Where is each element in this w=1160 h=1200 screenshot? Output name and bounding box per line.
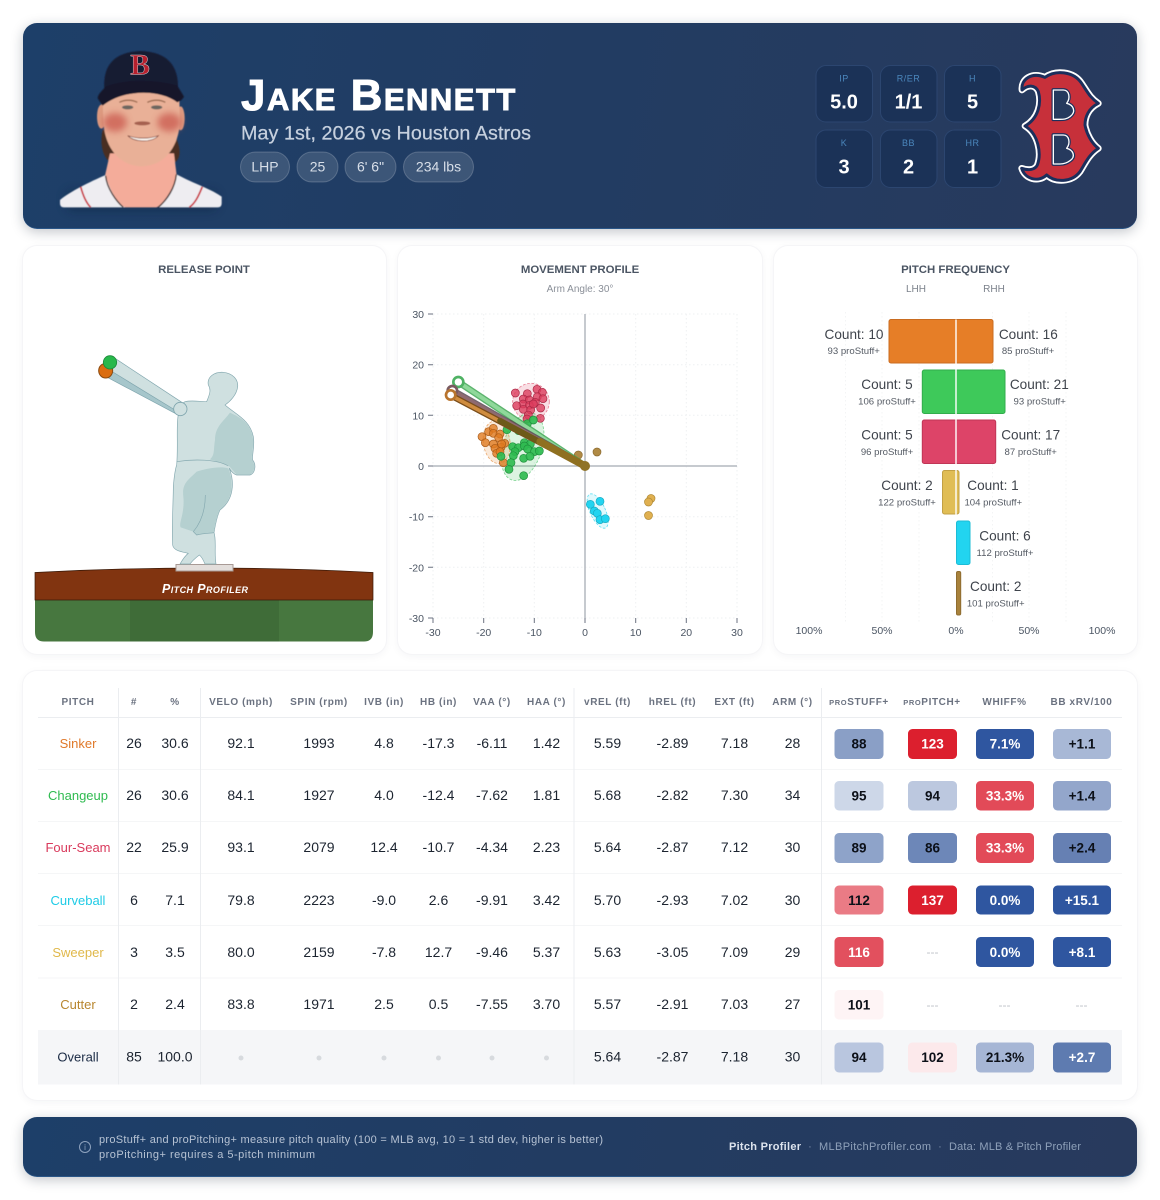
center line <box>955 320 957 514</box>
batter side labels: LHH <box>906 284 926 295</box>
row: Cutter <box>60 990 1088 1020</box>
row: Overall <box>57 1042 1111 1072</box>
footer credits: MLBPitchProfiler.com <box>819 1141 931 1153</box>
row: Curveball: 137 <box>921 893 944 908</box>
row: Changeup: +1.4 <box>1069 788 1096 804</box>
row: Curveball: -9.91 <box>476 892 508 908</box>
row: Four-Seam: -4.34 <box>476 839 508 855</box>
bar: Four-Seam: Count: 17 <box>1001 428 1060 443</box>
row: Cutter: 2 <box>130 996 138 1012</box>
row: Four-Seam: 12.4 <box>370 839 398 855</box>
row: Cutter: 101 <box>848 998 871 1012</box>
bar: Four-Seam: 96 proStuff+ <box>861 447 914 458</box>
row: Overall: 102 <box>921 1050 944 1065</box>
footer credits: · <box>938 1141 942 1153</box>
footnote text: proStuff+ and proPitching+ measure pitch quality (100 = MLB avg, 10 = 1 std dev, higher is better) <box>99 1134 603 1146</box>
row: Changeup: 4.0 <box>374 787 394 803</box>
game subtitle: May 1st, 2026 vs Houston Astros <box>241 122 531 144</box>
row: Cutter: 2.5 <box>374 996 394 1012</box>
scatter grid and axes: 10 <box>630 627 642 639</box>
row: Four-Seam: 89 <box>851 840 867 856</box>
bar: Four-Seam: 87 proStuff+ <box>1005 447 1057 458</box>
row: Sinker: 7.1% <box>990 736 1020 752</box>
player chips: LHP <box>251 158 279 174</box>
table header: VELO (mph) <box>209 697 273 708</box>
batter side labels <box>906 284 1005 295</box>
row: Cutter: 0.5 <box>429 996 448 1012</box>
row: Changeup: -2.82 <box>657 787 689 803</box>
table header: PROSTUFF+ <box>829 697 889 708</box>
bar: Cutter <box>956 572 1025 615</box>
row: Sinker: 7.18 <box>721 735 748 751</box>
bar: Sinker: Count: 10 <box>825 327 884 342</box>
table header: IVB (in) <box>364 697 404 708</box>
row: Curveball: 79.8 <box>227 892 255 908</box>
row: Cutter: --- <box>926 998 938 1012</box>
row: Overall: 7.18 <box>721 1048 748 1064</box>
row: Cutter: -7.55 <box>476 996 508 1012</box>
row: Sinker: 123 <box>921 736 944 752</box>
sweeper points <box>644 494 655 520</box>
bar: Curveball <box>956 521 1034 564</box>
frequency axis labels: 100% <box>1089 625 1115 637</box>
bar: Changeup: 93 proStuff+ <box>1014 396 1066 408</box>
row: Sweeper: -7.8 <box>372 944 396 960</box>
row: Sinker: 92.1 <box>227 735 255 751</box>
row: Four-Seam: Four-Seam <box>45 840 111 855</box>
bar: Sinker: 93 proStuff+ <box>828 346 880 357</box>
bar: Sweeper: 122 proStuff+ <box>878 498 936 508</box>
row: Changeup: -7.62 <box>476 787 508 803</box>
table header: SPIN (rpm) <box>290 697 348 708</box>
row: Sinker: +1.1 <box>1069 736 1096 752</box>
footer credits: Pitch Profiler <box>729 1141 802 1153</box>
heading: movement profile: MOVEMENT PROFILE <box>521 264 640 276</box>
scatter grid and axes: 20 <box>412 360 424 372</box>
pitch clusters and arm lines <box>446 377 613 531</box>
bar: Sinker <box>825 320 1058 363</box>
player photo: B <box>130 50 150 82</box>
heading: release point: RELEASE POINT <box>158 264 250 276</box>
table header: ARM (°) <box>772 697 813 708</box>
row: Sweeper: Sweeper <box>52 945 104 960</box>
game line stats: R/ER <box>897 74 920 84</box>
release point arm and markers <box>99 356 187 416</box>
row: Sweeper: 7.09 <box>721 944 748 960</box>
row: Sweeper: -9.46 <box>476 944 508 960</box>
row: Overall: 100.0 <box>157 1048 193 1064</box>
row: Sweeper: 80.0 <box>227 944 255 960</box>
game line stats: 1 <box>967 156 978 178</box>
panel: release point <box>23 246 386 654</box>
frequency axis labels: 50% <box>871 625 893 637</box>
row: Four-Seam: 22 <box>126 839 142 855</box>
scatter grid and axes: 0 <box>582 627 588 639</box>
row: Sweeper: 3 <box>130 944 138 960</box>
row: Curveball: +15.1 <box>1065 893 1100 908</box>
row: Overall: +2.7 <box>1069 1050 1095 1065</box>
table header: WHIFF% <box>982 697 1027 708</box>
row: Curveball: 2223 <box>303 892 335 908</box>
row: Curveball <box>51 886 1111 914</box>
row: Cutter: 7.03 <box>721 996 748 1012</box>
row: Cutter: -2.91 <box>657 996 689 1012</box>
bar: Curveball: 112 proStuff+ <box>976 548 1034 559</box>
row: Four-Seam: 86 <box>925 840 940 856</box>
row: Four-Seam: 33.3% <box>986 840 1024 856</box>
footnote text <box>99 1134 603 1161</box>
bar: Sinker: 85 proStuff+ <box>1002 346 1055 357</box>
row: Cutter: 5.57 <box>594 996 621 1012</box>
row: Changeup: 1927 <box>303 787 335 803</box>
row: Curveball: 6 <box>130 892 138 908</box>
scatter grid and axes: -20 <box>476 627 491 639</box>
row: Sweeper: 29 <box>785 944 800 960</box>
row: Sinker: 5.59 <box>594 735 621 751</box>
scatter grid and axes: 0 <box>418 461 424 473</box>
row: Curveball: 7.02 <box>721 892 748 908</box>
table header: vREL (ft) <box>584 697 631 708</box>
scatter grid and axes: -30 <box>425 627 441 639</box>
player chips <box>240 152 474 182</box>
scatter grid and axes: -10 <box>527 627 542 639</box>
footer credits: · <box>808 1141 812 1153</box>
scatter grid and axes: -20 <box>409 562 424 574</box>
panel: pitch metrics table <box>23 671 1137 1100</box>
row: Sinker: 1993 <box>303 735 335 751</box>
row: Changeup: 33.3% <box>986 788 1024 804</box>
row: Curveball: 2.6 <box>429 892 448 908</box>
row: Four-Seam <box>45 833 1111 863</box>
bar: Sweeper: 104 proStuff+ <box>964 498 1023 508</box>
row: Sinker: Sinker <box>60 736 97 751</box>
bar: Four-Seam: Count: 5 <box>861 428 913 443</box>
table header: PROPITCH+ <box>903 697 961 708</box>
row: Sweeper: --- <box>926 945 938 959</box>
row: Cutter: --- <box>998 998 1010 1012</box>
footer credits: Data: MLB & Pitch Profiler <box>949 1141 1081 1153</box>
frequency axis labels <box>796 625 1115 637</box>
arm angle note: Arm Angle: 30° <box>547 284 613 295</box>
game line stats: 5.0 <box>830 92 858 114</box>
game line stats: H <box>969 74 976 84</box>
player chips: 6' 6" <box>357 158 384 174</box>
row: Curveball: -9.0 <box>372 892 396 908</box>
row: Curveball: 30 <box>785 892 800 908</box>
player chips: 25 <box>310 158 325 174</box>
row: Changeup: 26 <box>126 787 142 803</box>
table header: PITCH <box>62 697 94 708</box>
player name: Jake Bennett <box>241 71 517 120</box>
table header: HAA (°) <box>527 697 566 708</box>
row: Sweeper: 0.0% <box>990 945 1020 960</box>
frequency axis labels: 50% <box>1018 625 1040 637</box>
row: Changeup: 5.68 <box>594 787 621 803</box>
row: Four-Seam: 5.64 <box>594 839 621 855</box>
row: Sweeper: 3.5 <box>165 944 185 960</box>
table header: % <box>170 697 180 708</box>
row: Changeup: 1.81 <box>533 787 560 803</box>
row: Four-Seam: 7.12 <box>721 839 748 855</box>
row: Four-Seam: 25.9 <box>161 839 189 855</box>
row: Sweeper: -3.05 <box>657 944 689 960</box>
row: Sinker: -17.3 <box>423 735 455 751</box>
bar: Sweeper: Count: 2 <box>881 478 933 493</box>
row: Changeup <box>48 781 1111 810</box>
row: Curveball: -2.93 <box>657 892 689 908</box>
bar: Sweeper <box>878 470 1023 514</box>
table header <box>62 697 1112 708</box>
table header: HB (in) <box>420 697 457 708</box>
row: Overall: -2.87 <box>657 1048 689 1064</box>
row: Sweeper <box>52 937 1111 967</box>
row: Changeup: 34 <box>785 787 800 803</box>
footnote text: proPitching+ requires a 5-pitch minimum <box>99 1149 315 1161</box>
panel: pitch frequency <box>774 246 1137 654</box>
bar: Sinker: Count: 16 <box>999 327 1058 342</box>
row: Sweeper: 116 <box>848 945 870 960</box>
bar: Cutter: 101 proStuff+ <box>967 598 1025 610</box>
row: Curveball: 5.70 <box>594 892 621 908</box>
row: Sinker: 30.6 <box>161 735 189 751</box>
player photo <box>60 50 222 210</box>
game line stats <box>816 66 1001 188</box>
game line stats: 2 <box>903 156 914 178</box>
scatter grid and axes: -30 <box>409 613 424 625</box>
panel: movement profile <box>398 246 762 654</box>
row: Sweeper: +8.1 <box>1069 945 1096 960</box>
row: Four-Seam: +2.4 <box>1069 840 1096 856</box>
scatter grid and axes: 10 <box>412 410 424 422</box>
row: Overall: Overall <box>57 1050 99 1064</box>
bar: Changeup: Count: 21 <box>1010 377 1069 392</box>
bar: Changeup: 106 proStuff+ <box>858 396 916 408</box>
overall row background <box>38 1030 1122 1084</box>
row: Sweeper: 2159 <box>303 944 335 960</box>
pitcher mound and field <box>35 564 373 642</box>
game line stats: IP <box>839 74 849 84</box>
icon: info <box>80 1142 90 1152</box>
scatter grid and axes: 30 <box>731 627 743 639</box>
row: Four-Seam: 30 <box>785 839 800 855</box>
game line stats: HR <box>966 138 980 148</box>
row: Overall: 5.64 <box>594 1048 621 1064</box>
row: Sinker: -2.89 <box>657 735 689 751</box>
row: Sweeper: 5.63 <box>594 944 621 960</box>
heading: pitch frequency: PITCH FREQUENCY <box>901 264 1010 276</box>
row: Cutter: 27 <box>785 996 800 1012</box>
row: Four-Seam: -2.87 <box>657 839 689 855</box>
scatter grid and axes: 30 <box>412 309 424 321</box>
row: Changeup: 7.30 <box>721 787 748 803</box>
table header: BB xRV/100 <box>1051 697 1112 708</box>
pitcher silhouette <box>172 372 255 564</box>
bar: Cutter: Count: 2 <box>970 579 1021 594</box>
row: Cutter: 2.4 <box>165 996 185 1012</box>
row: Four-Seam: 93.1 <box>227 839 255 855</box>
bar: Changeup <box>858 370 1069 414</box>
game line stats: 1/1 <box>895 92 922 114</box>
footer banner <box>23 1117 1137 1177</box>
icon: Red Sox B logo <box>1022 73 1098 180</box>
game line stats: K <box>841 138 847 148</box>
row: Cutter: Cutter <box>60 997 96 1012</box>
game line stats: 5 <box>967 92 978 114</box>
table rules <box>38 770 1122 978</box>
batter side labels: RHH <box>983 284 1005 295</box>
row: Sinker: 4.8 <box>374 735 394 751</box>
row: Cutter: 83.8 <box>227 996 255 1012</box>
bar: Changeup: Count: 5 <box>861 377 913 392</box>
game line stats: BB <box>902 138 915 148</box>
row: Changeup: -12.4 <box>423 787 455 803</box>
row: Curveball: Curveball <box>51 893 106 908</box>
scatter grid and axes: 20 <box>680 627 692 639</box>
row: Curveball: 0.0% <box>990 893 1020 908</box>
row: Overall: 30 <box>785 1048 800 1064</box>
row: Sinker: 88 <box>851 736 867 752</box>
game line stats: 3 <box>838 156 850 178</box>
row: Four-Seam: 2079 <box>303 839 335 855</box>
row: Four-Seam: -10.7 <box>423 839 455 855</box>
table header: EXT (ft) <box>714 697 755 708</box>
row: Overall: 94 <box>851 1050 867 1065</box>
bar: Four-Seam <box>861 420 1060 464</box>
frequency axis labels: 0% <box>948 625 964 637</box>
player chips: 234 lbs <box>416 158 461 174</box>
row: Overall: 21.3% <box>986 1050 1024 1065</box>
table header: # <box>131 697 137 708</box>
row: Curveball: 112 <box>848 893 870 908</box>
row: Sweeper: 12.7 <box>425 944 452 960</box>
row: Four-Seam: 2.23 <box>533 839 560 855</box>
row: Cutter: 3.70 <box>533 996 560 1012</box>
row: Changeup: 95 <box>851 788 867 804</box>
row: Sinker <box>60 729 1111 759</box>
frequency gridlines <box>846 312 1066 622</box>
scatter grid and axes <box>409 309 743 639</box>
row: Cutter: 1971 <box>303 996 335 1012</box>
row: Changeup: 84.1 <box>227 787 255 803</box>
icon: info: i <box>84 1143 86 1152</box>
scatter grid and axes: -10 <box>409 512 424 524</box>
bar: Curveball: Count: 6 <box>979 528 1031 544</box>
footer credits <box>729 1141 1081 1153</box>
header banner <box>23 23 1137 229</box>
row: Sinker: 1.42 <box>533 735 560 751</box>
logo text: Pitch Profiler: Pitch Profiler <box>162 582 248 596</box>
row: Changeup: 30.6 <box>161 787 189 803</box>
row: Sweeper: 5.37 <box>533 944 560 960</box>
row: Changeup: 94 <box>925 788 940 804</box>
row: Cutter: --- <box>1076 998 1088 1012</box>
row: Changeup: Changeup <box>48 788 108 803</box>
row: Overall: 85 <box>126 1048 142 1064</box>
row: Curveball: 7.1 <box>165 892 185 908</box>
table header: VAA (°) <box>473 697 511 708</box>
frequency axis labels: 100% <box>796 625 822 637</box>
table header: hREL (ft) <box>649 697 696 708</box>
bar: Sweeper: Count: 1 <box>967 478 1019 493</box>
row: Sinker: 26 <box>126 735 142 751</box>
row: Sinker: 28 <box>785 735 800 751</box>
row: Sinker: -6.11 <box>477 735 508 751</box>
row: Curveball: 3.42 <box>533 892 560 908</box>
